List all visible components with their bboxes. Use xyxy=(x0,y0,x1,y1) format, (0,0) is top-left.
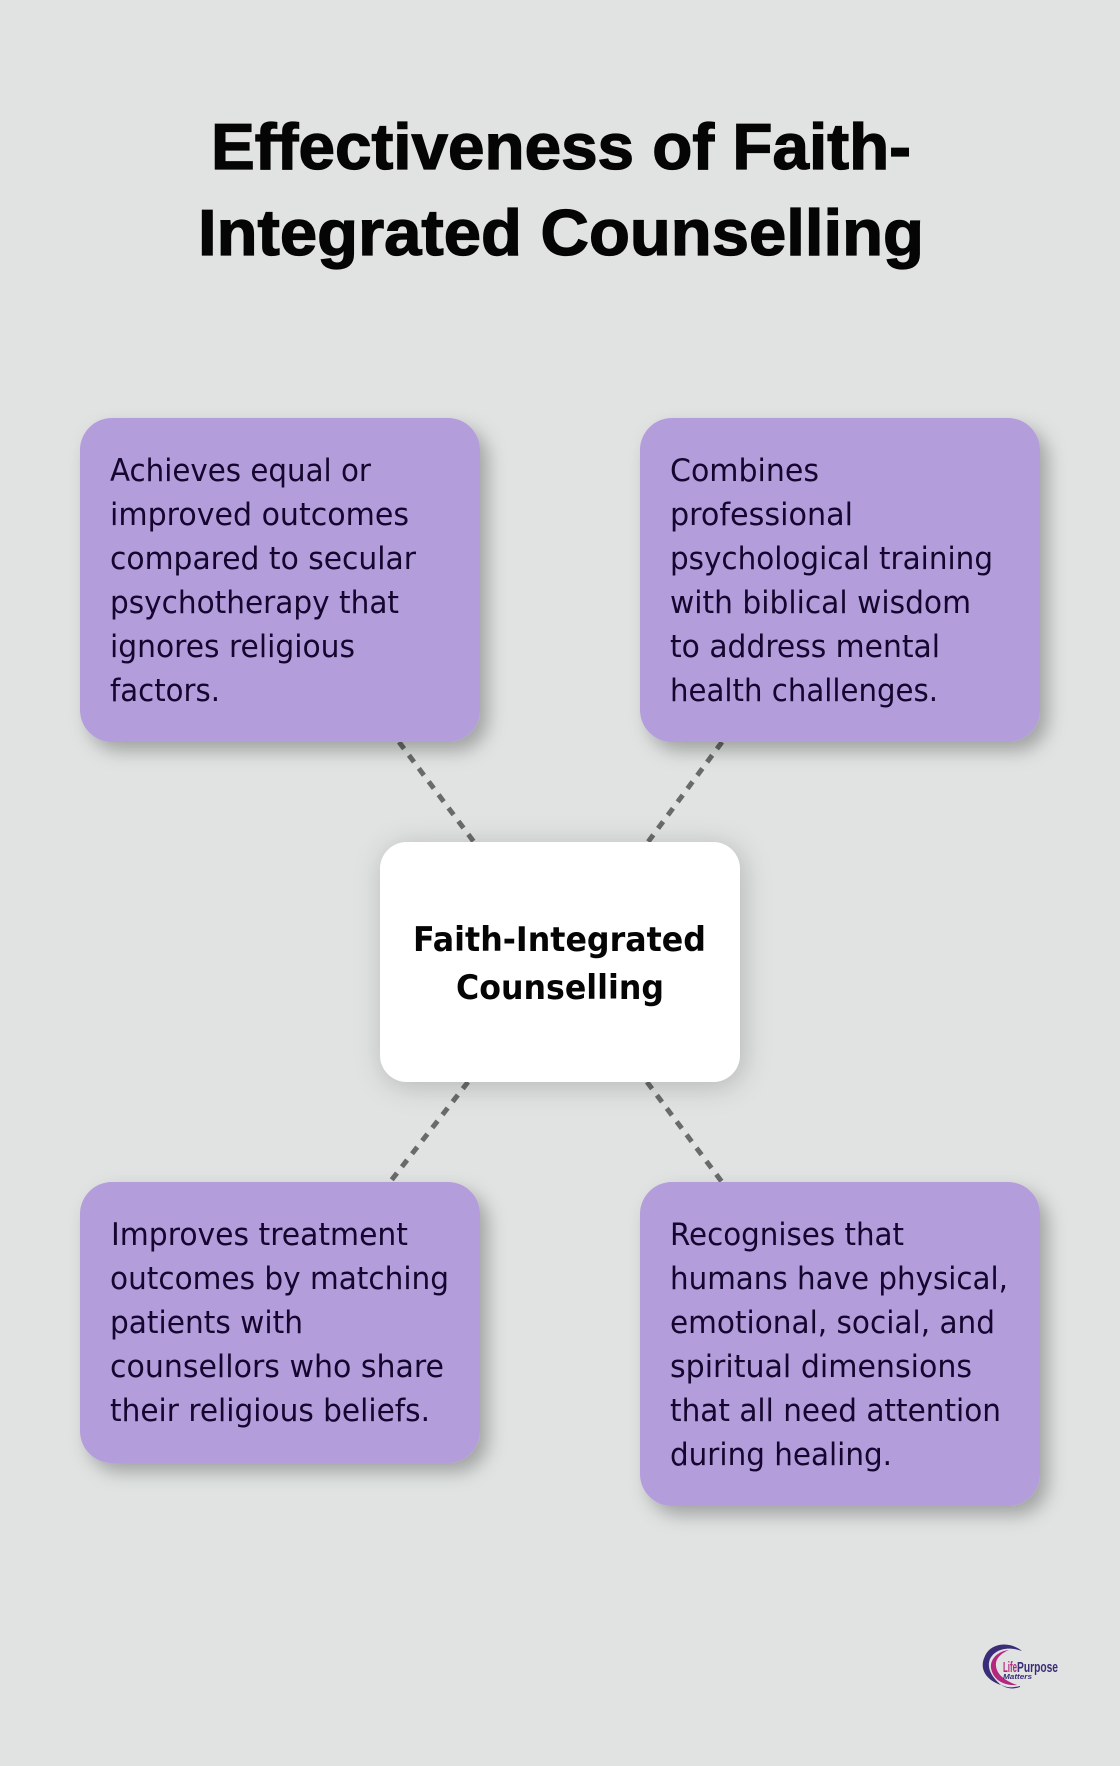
panel: equal or improved outcomes: improved outcomes xyxy=(110,497,409,533)
panel: equal or improved outcomes: ignores religious xyxy=(110,629,355,665)
title: Integrated Counselling xyxy=(198,196,924,269)
panel: matching patients with counsellors: counsellors who share xyxy=(110,1349,444,1385)
panel: centre topic: Faith-Integrated xyxy=(413,920,706,959)
panel: matching patients with counsellors: Improves treatment xyxy=(111,1217,408,1253)
panel: matching patients with counsellors xyxy=(80,1182,480,1463)
connector: top-left card to centre xyxy=(399,742,474,842)
panel: equal or improved outcomes: Achieves equal or xyxy=(110,453,371,489)
panel: whole-person dimensions: during healing. xyxy=(670,1437,892,1473)
title xyxy=(198,110,924,269)
panel: whole-person dimensions: spiritual dimensions xyxy=(670,1349,972,1385)
panel: professional training with biblical wisdom: to address mental xyxy=(670,629,940,665)
panel: professional training with biblical wisdom: with biblical wisdom xyxy=(670,585,971,621)
panel: professional training with biblical wisdom: health challenges. xyxy=(670,673,938,709)
panel: equal or improved outcomes: psychotherapy that xyxy=(110,585,399,621)
panel: equal or improved outcomes: compared to secular xyxy=(110,541,416,577)
panel: whole-person dimensions: Recognises that xyxy=(670,1217,904,1253)
panel: whole-person dimensions: humans have physical, xyxy=(670,1261,1008,1297)
panel: matching patients with counsellors: their religious beliefs. xyxy=(110,1393,430,1429)
panel: whole-person dimensions: emotional, social, and xyxy=(670,1305,995,1341)
logo: Life Purpose Matters: Purpose xyxy=(1017,1659,1058,1676)
panel: equal or improved outcomes: factors. xyxy=(110,673,220,709)
panel: centre topic: Counselling xyxy=(456,968,664,1007)
panel: professional training with biblical wisdom xyxy=(640,418,1040,742)
connector: centre to bottom-left card xyxy=(390,1082,468,1182)
panel: matching patients with counsellors: outcomes by matching xyxy=(110,1261,449,1297)
panel: equal or improved outcomes xyxy=(80,418,480,742)
panel: whole-person dimensions: that all need attention xyxy=(670,1393,1001,1429)
panel: professional training with biblical wisdom: professional xyxy=(670,497,853,533)
connector: top-right card to centre xyxy=(648,742,722,842)
panel: matching patients with counsellors: patients with xyxy=(110,1305,303,1341)
logo: Life Purpose Matters: Life xyxy=(1003,1659,1017,1676)
panel: professional training with biblical wisdom: psychological training xyxy=(670,541,993,577)
title: Effectiveness of Faith- xyxy=(211,110,911,183)
logo: Life Purpose Matters: Matters xyxy=(1003,1672,1032,1681)
panel: whole-person dimensions xyxy=(640,1182,1040,1506)
connector: centre to bottom-right card xyxy=(647,1082,722,1182)
panel: centre topic xyxy=(380,842,740,1082)
logo: Life Purpose Matters xyxy=(983,1645,1058,1688)
panel: professional training with biblical wisdom: Combines xyxy=(670,453,819,489)
